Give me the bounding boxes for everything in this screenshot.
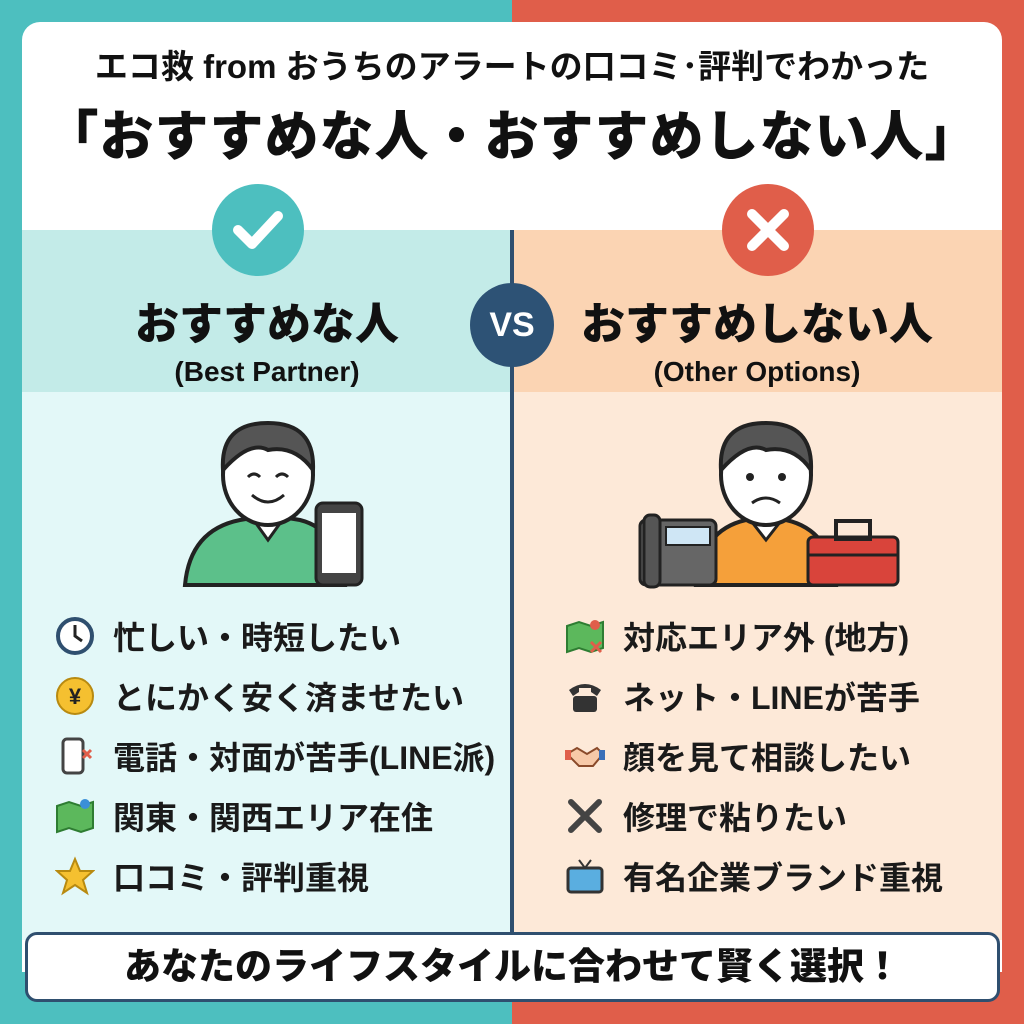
item: net dislike: ネット・LINEが苦手 xyxy=(623,680,920,716)
right panel xyxy=(512,230,1002,940)
item: busy: 忙しい・時短したい xyxy=(113,620,401,656)
heading: not recommended xyxy=(581,300,933,387)
item: cheap: ¥ xyxy=(69,684,82,709)
title xyxy=(44,48,980,167)
heading: recommended: おすすめな人 xyxy=(135,300,399,349)
item: brand: 有名企業ブランド重視 xyxy=(623,860,943,896)
heading: recommended: (Best Partner) xyxy=(174,356,360,387)
item: outside area: 対応エリア外 (地方) xyxy=(623,620,909,656)
item: repair: 修理で粘りたい xyxy=(623,800,847,836)
heading: not recommended: (Other Options) xyxy=(654,356,860,387)
illustration: worried person with phone and toolbox xyxy=(638,421,900,588)
item: kanto kansai: 関東・関西エリア在住 xyxy=(113,800,433,836)
title: エコ救 from おうちのアラートの口コミ･評判でわかった xyxy=(95,48,929,85)
list: recommended xyxy=(55,617,495,896)
left panel xyxy=(22,230,512,940)
list: not recommended xyxy=(565,620,943,896)
vs badge xyxy=(470,283,554,367)
item: face to face: 顔を見て相談したい xyxy=(623,740,911,776)
icon: check xyxy=(212,184,304,276)
item: cheap: とにかく安く済ませたい xyxy=(113,680,464,716)
heading: recommended xyxy=(135,300,399,387)
heading: not recommended: おすすめしない人 xyxy=(581,300,933,349)
icon: cross xyxy=(722,184,814,276)
bottom banner xyxy=(25,932,1000,1002)
item: phone dislike: 電話・対面が苦手(LINE派) xyxy=(113,740,495,776)
item: reviews: 口コミ・評判重視 xyxy=(113,860,369,896)
illustration: happy person with phone xyxy=(182,421,364,587)
vs badge: VS xyxy=(489,306,535,344)
title: 「おすすめな人・おすすめしない人」 xyxy=(44,107,980,167)
bottom banner: あなたのライフスタイルに合わせて賢く選択！ xyxy=(124,946,901,987)
